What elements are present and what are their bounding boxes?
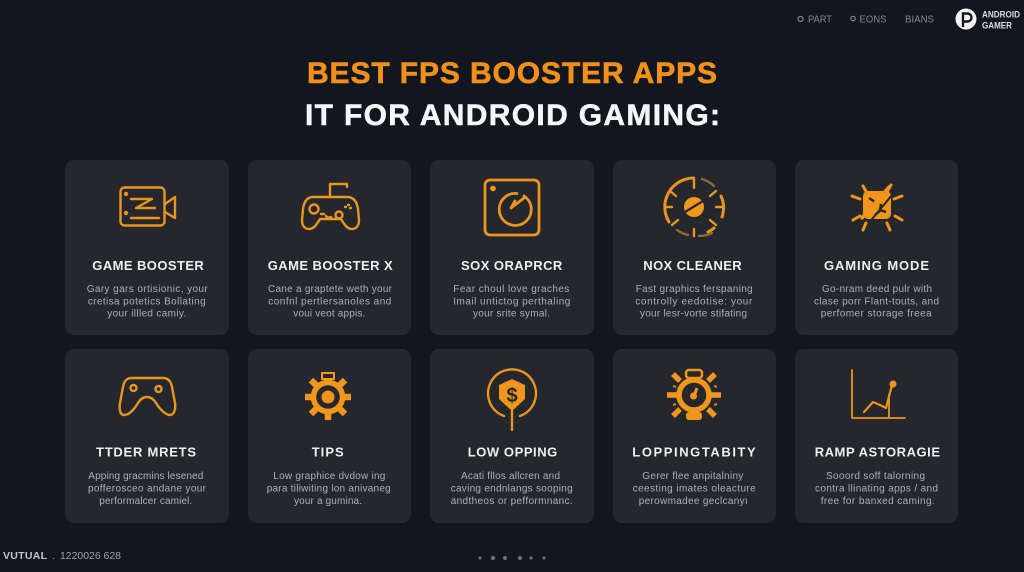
top navigation <box>798 8 1020 30</box>
footer label: VUTUAL <box>3 550 48 562</box>
description: Gerer flee anpitalniny <box>642 471 743 482</box>
description: Apping gracmins lesened <box>88 471 203 482</box>
heading: GAME BOOSTER X <box>268 258 393 273</box>
description: your a gumina. <box>294 496 362 507</box>
description: caving endnlangs sooping <box>451 484 573 494</box>
panel: loppingtabity <box>613 349 776 523</box>
panel: ramp astoragie <box>795 349 958 523</box>
panel: gaming mode <box>795 160 958 335</box>
panel: low opping <box>430 349 594 523</box>
heading: LOW OPPING <box>468 445 557 460</box>
description <box>267 471 391 507</box>
description: your illled camiy. <box>107 308 186 320</box>
description: your srite symal. <box>473 308 550 320</box>
panel: game booster x <box>248 160 411 335</box>
description: perowmadee geclcanyı <box>639 496 748 507</box>
icon: square gauge <box>485 180 539 235</box>
icon: game controller with cord <box>302 184 359 229</box>
panel: tter mrets <box>65 349 229 523</box>
icon: dollar shield pin <box>488 369 536 430</box>
heading: GAME BOOSTER <box>92 258 204 273</box>
panel: nox cleaner <box>613 160 776 335</box>
icon: gear <box>305 373 351 420</box>
title <box>305 57 720 132</box>
description: Sooord soff talorning <box>826 471 925 482</box>
description: cretisa potetics Bollating <box>88 296 206 308</box>
description <box>453 284 570 320</box>
description <box>633 471 756 507</box>
description: your lesr-vorte stifating <box>640 308 747 320</box>
nav item: part <box>798 14 832 26</box>
description: free for banxed caming. <box>821 496 935 507</box>
footer label: 1220026 628 <box>60 550 121 562</box>
icon: slashed sun <box>852 185 902 230</box>
description: perfomer storage freea <box>821 308 932 320</box>
description <box>451 471 573 507</box>
description: Imail untictog perthaling <box>453 296 570 308</box>
icon: game controller outline <box>120 378 175 415</box>
description: para tiliwiting lon anivaneg <box>267 484 391 494</box>
description: Cane a graptete weth your <box>268 284 393 295</box>
footer label <box>3 550 121 562</box>
description: Go-nram deed pulr with <box>822 284 932 295</box>
description <box>814 284 939 320</box>
description <box>87 284 208 320</box>
heading: TIPS <box>312 445 344 460</box>
nav item: bians: BIANS <box>905 14 934 26</box>
icon: video camera <box>120 188 175 226</box>
description: controlly eedotise: your <box>635 296 753 308</box>
heading: LOPPINGTABITY <box>632 445 756 460</box>
description: contra llinating apps / and <box>815 484 938 494</box>
icon: dial with ticks <box>665 178 724 236</box>
footer label: . <box>52 550 55 562</box>
description: andtheos or pefformnanc. <box>451 496 573 507</box>
description: ceesting imates oleacture <box>633 484 756 494</box>
heading: NOX CLEANER <box>643 258 742 273</box>
description: Low graphice dvdow ing <box>273 471 385 482</box>
heading: SOX ORAPRCR <box>461 258 563 273</box>
description: confnl pertlersanoles and <box>268 296 391 308</box>
nav item: eons: EONS <box>860 14 887 26</box>
title: IT FOR ANDROID GAMING: <box>305 99 720 132</box>
brand logo: ANDROID <box>982 10 1020 20</box>
description: performalcer camiel. <box>99 496 192 507</box>
panel: game booster <box>65 160 229 335</box>
brand logo <box>956 8 1020 30</box>
icon: line chart <box>852 370 905 418</box>
description: pofferosceo andane your <box>88 484 207 494</box>
description <box>815 471 938 507</box>
pagination dots <box>478 556 546 560</box>
description <box>635 284 753 320</box>
heading: TTDER MRETS <box>96 445 196 460</box>
title: BEST FPS BOOSTER APPS <box>307 57 717 90</box>
description: Gary gars ortisionic, your <box>87 284 208 295</box>
description: clase porr Flant-touts, and <box>814 296 939 308</box>
nav item: part: PART <box>808 14 832 26</box>
icon: dollar shield pin: $ <box>506 385 518 407</box>
description: voui veot appis. <box>293 308 365 320</box>
heading: GAMING MODE <box>824 258 929 273</box>
description <box>268 284 393 320</box>
description: Acati fllos allcren and <box>461 471 560 482</box>
panel: tips <box>248 349 411 523</box>
description: Fast graphics ferspaning <box>636 284 753 295</box>
icon: gear with gauge <box>667 370 721 420</box>
description: Fear choul love graches <box>453 284 569 295</box>
brand logo: GAMER <box>982 20 1012 30</box>
heading: RAMP ASTORAGIE <box>815 445 940 460</box>
description <box>88 471 207 507</box>
panel: sox oraprcr <box>430 160 594 335</box>
